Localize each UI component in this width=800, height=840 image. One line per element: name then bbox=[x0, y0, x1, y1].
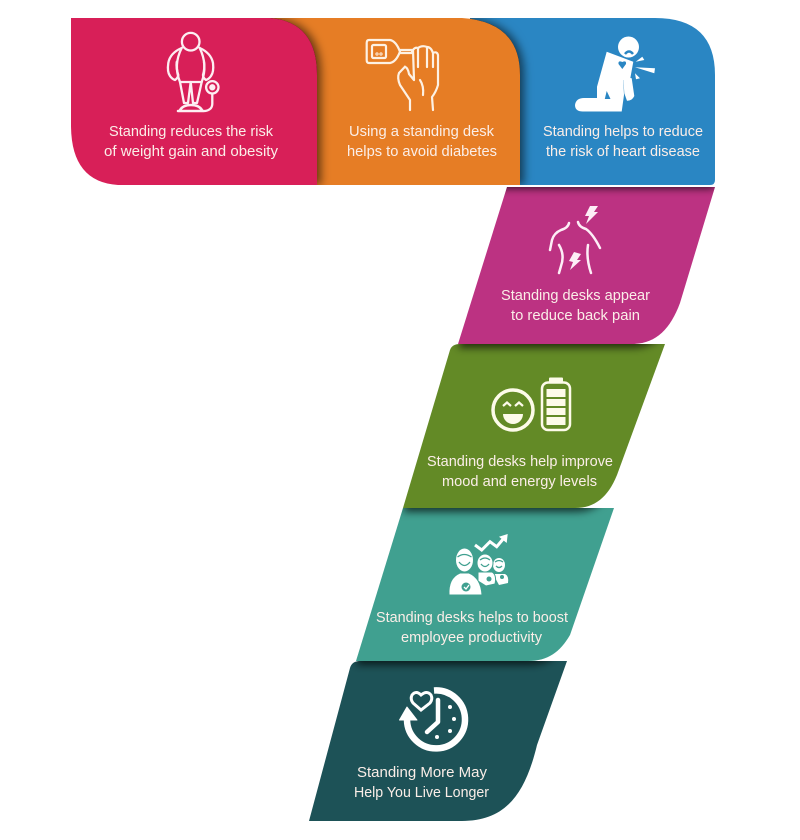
panel: heart disease bbox=[470, 18, 715, 185]
text: diabetes bbox=[347, 123, 497, 160]
text: live longer: Standing More May bbox=[357, 764, 487, 781]
panel: mood and energy bbox=[403, 344, 665, 508]
icon: back with lightning bbox=[550, 206, 600, 273]
text: employee productivity: Standing desks helps to boost bbox=[376, 609, 569, 626]
text: mood and energy: mood and energy levels bbox=[442, 473, 597, 490]
text: mood and energy bbox=[427, 453, 613, 490]
text: live longer: Help You Live Longer bbox=[354, 784, 489, 801]
text: back pain: to reduce back pain bbox=[511, 307, 640, 324]
panel: live longer bbox=[309, 661, 567, 821]
text: weight gain bbox=[104, 123, 279, 160]
text: back pain bbox=[501, 287, 650, 324]
text: back pain: Standing desks appear bbox=[501, 287, 650, 304]
text: live longer bbox=[354, 764, 489, 801]
icon: person with chest pain bbox=[575, 36, 655, 112]
text: mood and energy: Standing desks help improve bbox=[427, 453, 613, 470]
text: heart disease: Standing helps to reduce bbox=[543, 123, 703, 140]
icon: smiley and battery bbox=[493, 378, 570, 430]
icon: glucose meter and hand bbox=[367, 40, 438, 110]
text: heart disease bbox=[543, 123, 703, 160]
panel: employee productivity bbox=[356, 508, 614, 661]
text: weight gain: Standing reduces the risk bbox=[109, 123, 273, 140]
text: employee productivity bbox=[376, 609, 569, 646]
icon: happy employees bbox=[449, 534, 508, 595]
icon: clock with heart bbox=[400, 690, 465, 748]
text: employee productivity: employee productivity bbox=[401, 629, 542, 646]
text: diabetes: Using a standing desk bbox=[349, 123, 494, 140]
panel: back pain bbox=[458, 187, 715, 344]
icon: person on scale bbox=[168, 33, 218, 111]
text: heart disease: the risk of heart disease bbox=[546, 143, 700, 160]
text: weight gain: of weight gain and obesity bbox=[104, 143, 279, 160]
panel: diabetes bbox=[270, 18, 520, 185]
panel: weight gain bbox=[71, 18, 317, 185]
text: diabetes: helps to avoid diabetes bbox=[347, 143, 497, 160]
